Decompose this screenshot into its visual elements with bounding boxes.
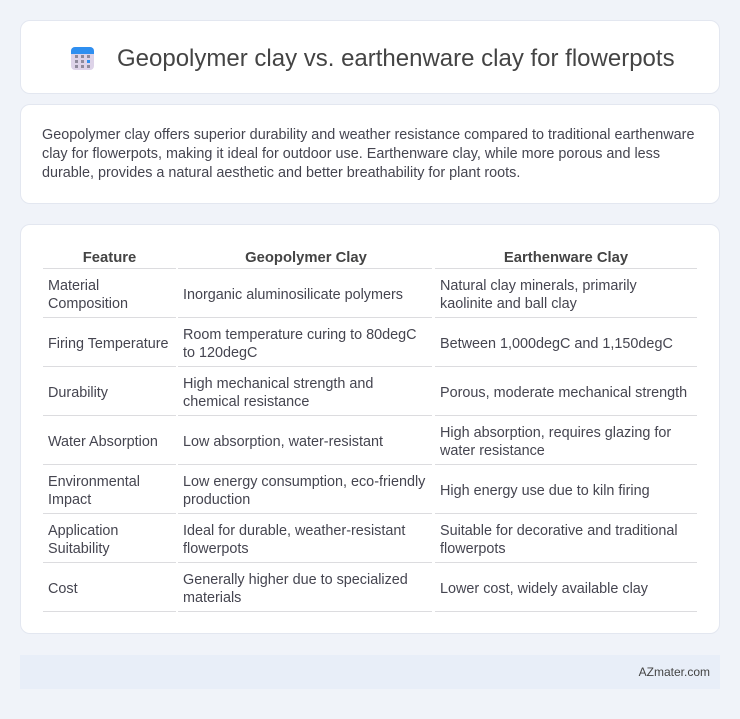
row: Environmental Impact: Impact: [48, 492, 91, 508]
cell: geopolymer application: [183, 523, 406, 557]
column header: Earthenware Clay: Earthenware Clay: [504, 250, 628, 266]
summary text: [42, 127, 694, 181]
row: Water Absorption: Water Absorption: [48, 434, 158, 450]
column header: Geopolymer Clay: Geopolymer Clay: [245, 250, 367, 266]
cell: earthenware cost: Lower cost, widely available clay: [440, 581, 648, 597]
cell: geopolymer durability: [183, 376, 373, 410]
cell: earthenware absorption: [440, 425, 671, 459]
cell: earthenware absorption: High absorption, requires glazing for: [440, 425, 671, 441]
cell: geopolymer cost: materials: [183, 590, 241, 606]
cell: earthenware application: Suitable for decorative and traditional: [440, 523, 678, 539]
cell: geopolymer absorption: Low absorption, water-resistant: [183, 434, 383, 450]
panel: summary: [20, 104, 720, 204]
cell: earthenware composition: Natural clay minerals, primarily: [440, 278, 637, 294]
column header: Feature: Feature: [83, 250, 136, 266]
cell: geopolymer cost: [183, 572, 408, 606]
cell: earthenware absorption: water resistance: [440, 443, 545, 459]
row: Material Composition: [48, 278, 128, 312]
title: Geopolymer clay vs. earthenware clay for flowerpots: [117, 45, 675, 72]
row: Application Suitability: Application: [48, 523, 118, 539]
cell: geopolymer cost: Generally higher due to specialized: [183, 572, 408, 588]
cell: geopolymer firing: to 120degC: [183, 345, 257, 361]
footer bar: [20, 655, 720, 689]
panel: comparison table: [20, 224, 720, 634]
row: Durability: Durability: [48, 385, 108, 401]
row: Material Composition: Composition: [48, 296, 128, 312]
icon: calendar: [71, 47, 94, 70]
cell: earthenware application: flowerpots: [440, 541, 506, 557]
cell: geopolymer durability: chemical resistance: [183, 394, 309, 410]
cell: geopolymer firing: [183, 327, 417, 361]
cell: geopolymer application: Ideal for durable, weather-resistant: [183, 523, 405, 539]
row: Environmental Impact: Environmental: [48, 474, 140, 490]
cell: earthenware composition: [440, 278, 637, 312]
summary text: clay for flowerpots, making it ideal for outdoor use. Earthenware clay, while more porous and less: [42, 146, 660, 162]
summary text: Geopolymer clay offers superior durability and weather resistance compared to traditional earthenware: [42, 127, 694, 143]
summary text: durable, provides a natural aesthetic and better breathability for plant roots.: [42, 165, 520, 181]
row: Cost: Cost: [48, 581, 78, 597]
cell: geopolymer impact: Low energy consumption, eco-friendly: [183, 474, 425, 490]
cell: geopolymer impact: production: [183, 492, 250, 508]
row: Firing Temperature: Firing Temperature: [48, 336, 169, 352]
cell: earthenware firing: Between 1,000degC and 1,150degC: [440, 336, 673, 352]
panel: title header: [20, 20, 720, 94]
row: Application Suitability: [48, 523, 118, 557]
row: Environmental Impact: [48, 474, 140, 508]
row: Application Suitability: Suitability: [48, 541, 110, 557]
cell: geopolymer composition: Inorganic aluminosilicate polymers: [183, 287, 403, 303]
cell: earthenware composition: kaolinite and ball clay: [440, 296, 577, 312]
cell: earthenware impact: High energy use due to kiln firing: [440, 483, 650, 499]
row: Material Composition: Material: [48, 278, 99, 294]
cell: geopolymer application: flowerpots: [183, 541, 249, 557]
cell: earthenware durability: Porous, moderate mechanical strength: [440, 385, 687, 401]
cell: geopolymer firing: Room temperature curing to 80degC: [183, 327, 417, 343]
cell: geopolymer durability: High mechanical strength and: [183, 376, 373, 392]
footer credit: AZmater.com: [639, 665, 710, 679]
cell: earthenware application: [440, 523, 678, 557]
cell: geopolymer impact: [183, 474, 426, 508]
